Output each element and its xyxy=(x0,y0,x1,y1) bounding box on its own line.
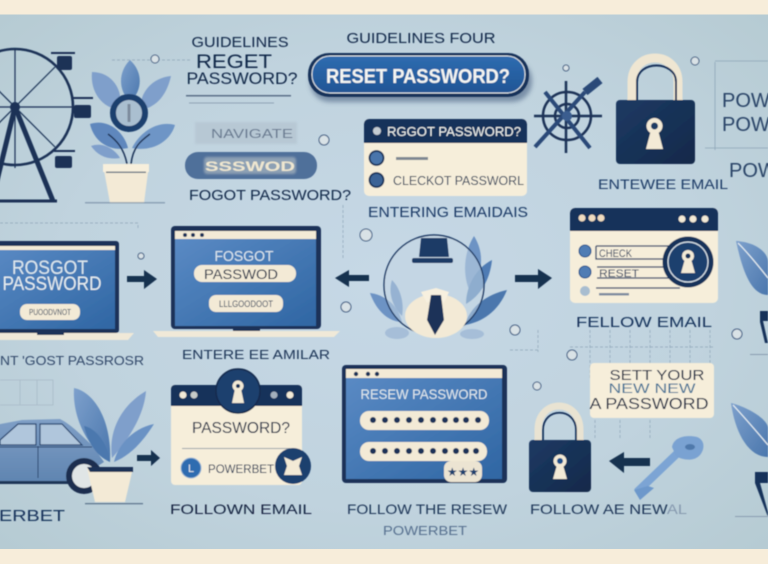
panel: password window with lock: PASSWORD? xyxy=(192,420,290,437)
callout: set your new password: SETT YOUR xyxy=(610,367,705,384)
panel: check and reset window: RESET xyxy=(599,268,639,280)
panel: reset password window xyxy=(342,365,507,483)
heading: guidelines reget password: PASSWORD? xyxy=(186,69,298,88)
panel: laptop forgot password centre xyxy=(153,226,340,337)
icon: leaf and pot lower right xyxy=(731,403,768,517)
icon: person with laurel xyxy=(370,235,507,339)
panel: laptop forgot password centre: PASSWOD xyxy=(204,266,278,282)
text: fogot password: FOGOT PASSWORD? xyxy=(189,187,351,204)
text: enter email familiar: ENTERE EE AMILAR xyxy=(182,347,330,362)
icon: leaf and pot upper right xyxy=(736,241,768,355)
panel: reset password window: RESEW PASSWORD xyxy=(360,386,488,402)
panel: laptop forgot password left: PUOODVNOT xyxy=(29,308,71,317)
text: powerbet left: ERBET xyxy=(0,508,66,525)
icon: target with wrench xyxy=(534,80,602,153)
top cream band xyxy=(0,0,768,14)
text: powerbet caption: POWERBET xyxy=(383,523,467,538)
icon: key xyxy=(634,436,703,500)
heading: guidelines reget password xyxy=(186,34,298,88)
text: powerbet repeated xyxy=(722,90,768,182)
text: entering emails: ENTERING EMAIDAIS xyxy=(368,204,528,221)
decorative markers xyxy=(138,55,742,390)
callout: set your new password: A PASSWORD xyxy=(590,396,708,413)
panel: check and reset window xyxy=(570,208,718,303)
text: follow email: FOLLOWN EMAIL xyxy=(170,501,312,517)
panel: forgot password dialog xyxy=(364,119,527,196)
arrow: right one xyxy=(127,270,157,289)
text: enter forgot password: NT 'GOST PASSROSR xyxy=(0,353,144,368)
arrow: left two xyxy=(335,270,369,287)
heading: guidelines reget password: REGET xyxy=(196,52,272,73)
arrow: left five xyxy=(609,452,650,473)
panel: check and reset window: CHECK xyxy=(599,248,633,260)
icon: car xyxy=(0,419,104,494)
label: navigate xyxy=(195,122,297,144)
text: follow the resew: FOLLOW THE RESEW xyxy=(347,501,508,517)
panel: laptop forgot password left: ROSGOT xyxy=(12,258,88,279)
icon: potted plant with ring xyxy=(85,60,175,204)
panel: laptop forgot password left: PASSWORD xyxy=(2,274,102,295)
callout: set your new password xyxy=(590,363,714,418)
bottom cream band xyxy=(0,549,768,564)
icon: lower padlock xyxy=(529,406,591,492)
panel: forgot password dialog: CLECKOT PASSWORL xyxy=(393,174,524,188)
heading: guidelines four: GUIDELINES FOUR xyxy=(346,30,496,47)
icon: potted plant lower xyxy=(74,388,154,504)
text: fellow email: FELLOW EMAIL xyxy=(576,315,712,331)
panel: laptop forgot password left xyxy=(0,241,134,340)
text: enter email: ENTEWEE EMAIL xyxy=(598,176,728,192)
icon: ferris wheel xyxy=(0,49,93,202)
icon: large padlock xyxy=(616,58,695,164)
panel: laptop forgot password centre: FOSGOT xyxy=(214,248,274,265)
button: reset password: RESET PASSWORD? xyxy=(326,66,510,88)
text: follow a new: FOLLOW AE NEW AL xyxy=(530,501,687,517)
heading: guidelines reget password: GUIDELINES xyxy=(192,34,288,51)
button: password: SSSWOD xyxy=(205,158,295,174)
label: navigate: NAVIGATE xyxy=(211,126,293,141)
button: password xyxy=(185,152,317,179)
panel: password window with lock xyxy=(171,369,311,485)
button: reset password xyxy=(308,53,532,102)
arrow: right three xyxy=(515,269,552,289)
panel: reset password window: ★★★ xyxy=(447,465,479,479)
panel: forgot password dialog: RGGOT PASSWORD? xyxy=(387,125,521,139)
callout: set your new password: NEW NEW xyxy=(608,380,696,396)
panel: laptop forgot password centre: LLLGOODOOT xyxy=(219,299,273,309)
panel: password window with lock: L xyxy=(188,463,194,475)
arrow: right four xyxy=(137,450,160,466)
panel: password window with lock: POWERBET xyxy=(208,462,275,476)
